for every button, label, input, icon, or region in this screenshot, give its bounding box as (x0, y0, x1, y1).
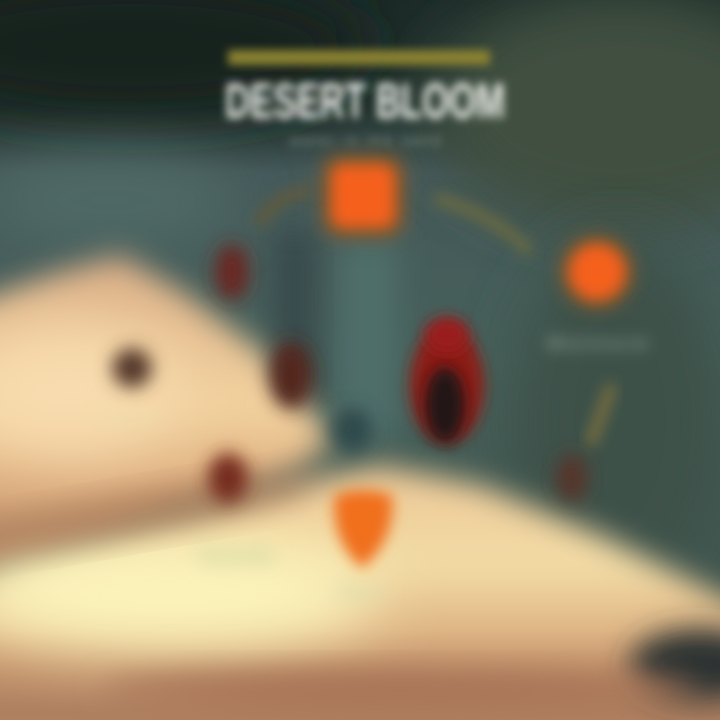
icon: dark marker lower right (556, 454, 588, 502)
label: right of center: Moisture (547, 333, 647, 355)
icon: dark red marker center left (269, 341, 313, 409)
title banner (225, 50, 505, 148)
subtitle: water in the sand (289, 132, 440, 148)
icon: large red and dark figure (410, 317, 484, 443)
title: DESERT BLOOM (225, 73, 505, 129)
node: orange square glow (322, 155, 404, 237)
node: orange circle glow (561, 236, 633, 308)
sand dune: foreground (0, 462, 720, 720)
label: under orange drop: Bloom (337, 580, 387, 605)
shadow below center column (332, 408, 372, 452)
icon: orange drop (334, 490, 392, 568)
node: orange circle (570, 245, 624, 299)
label: under brown circle: Roots (102, 408, 158, 430)
connector: right arc (435, 198, 530, 252)
icon: dark marker lower left (208, 453, 248, 503)
connector: lower right (590, 385, 612, 445)
title kicker bar (228, 50, 490, 65)
icon: brown circle on dune (112, 348, 152, 388)
label: lower left: Seeds (195, 539, 275, 572)
sand dune: left (0, 255, 335, 590)
connector: left arc (258, 190, 312, 225)
node: orange square (332, 165, 394, 227)
icon: dark red marker top left (215, 244, 249, 300)
